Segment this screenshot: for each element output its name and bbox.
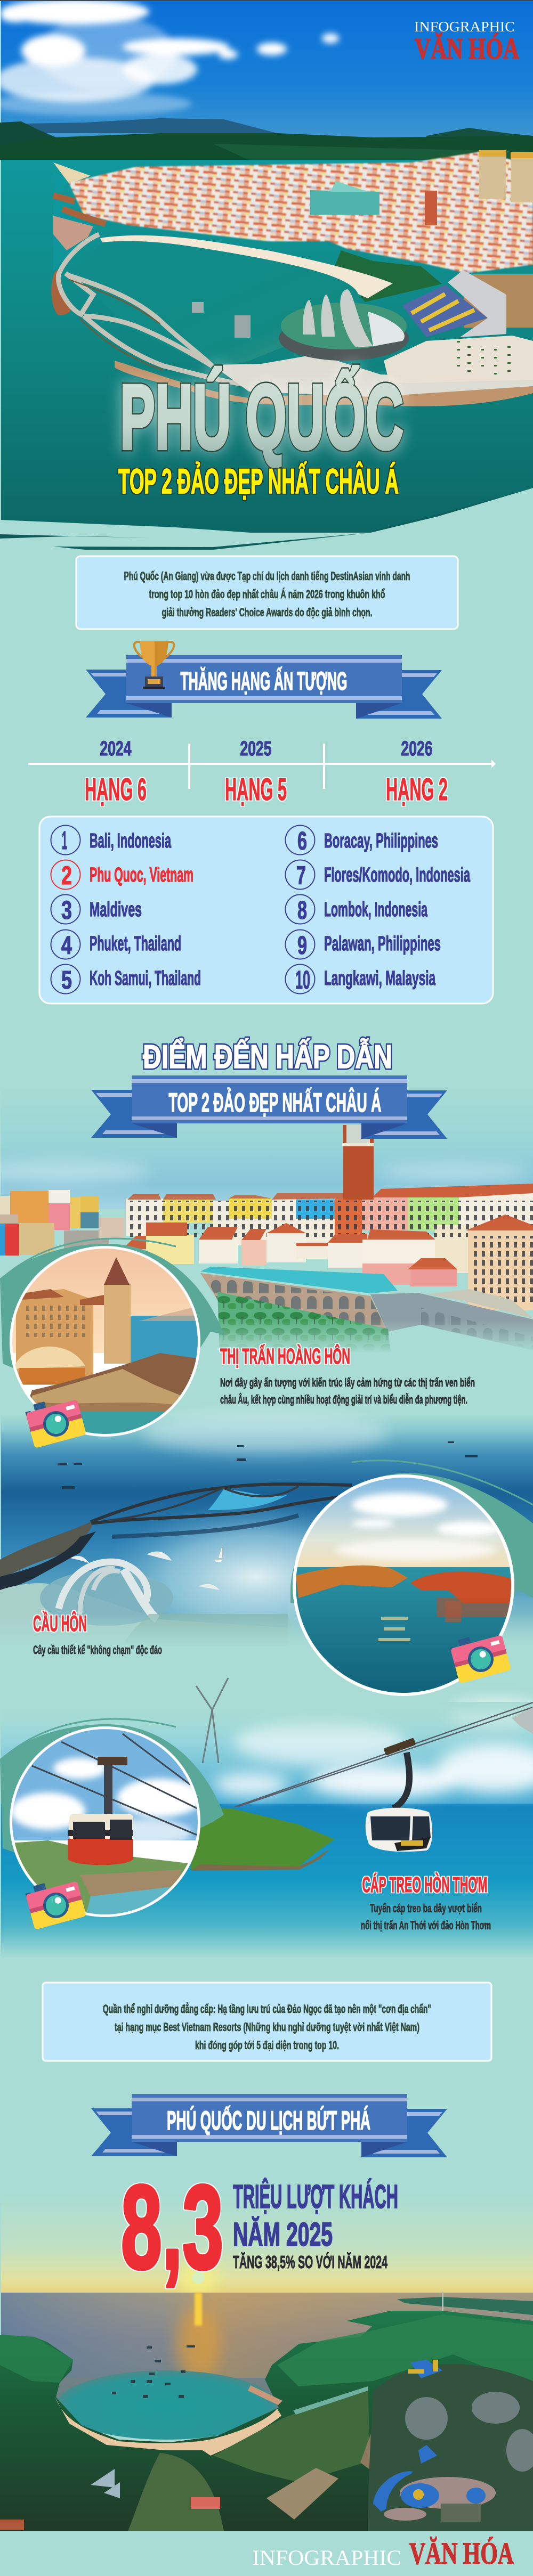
icon: camera 2 xyxy=(449,1629,511,1684)
footer logo: INFOGRAPHIC xyxy=(252,2546,401,2570)
statistic: 8,3 million visitors xyxy=(121,2161,398,2294)
panel: top 10 ranking: Boracay, Philippines xyxy=(324,830,438,852)
banner: Phú Quốc du lịch bứt phá xyxy=(91,2094,447,2157)
cables xyxy=(235,1702,533,1807)
panel: top 10 ranking: Maldives xyxy=(90,899,142,921)
timeline: 2024 xyxy=(100,738,131,760)
panel: top 10 ranking: 7 xyxy=(296,862,306,890)
timeline: 2025 xyxy=(240,738,272,760)
icon: camera 3 xyxy=(24,1875,86,1930)
hero photo xyxy=(0,0,533,550)
panel: top 10 ranking: 9 xyxy=(297,932,307,960)
text: Thị trấn Hoàng Hôn: THỊ TRẤN HOÀNG HÔN xyxy=(220,1344,350,1368)
heading: Điểm đến hấp dẫn: ĐIỂM ĐẾN HẤP DẪN xyxy=(143,1039,392,1075)
panel: top 10 ranking: Palawan, Philippines xyxy=(324,933,441,955)
title: Phú Quốc xyxy=(120,366,403,468)
cabin xyxy=(366,1738,432,1852)
panel: top 10 ranking: 1 xyxy=(62,827,67,855)
timeline: 2026 xyxy=(401,738,433,760)
photo: cable car xyxy=(0,1678,533,1958)
panel: top 10 ranking: Koh Samui, Thailand xyxy=(90,967,201,990)
panel: top 10 ranking: 10 xyxy=(295,966,310,994)
panel: top 10 ranking: Phuket, Thailand xyxy=(90,933,181,955)
tower xyxy=(196,1678,228,1763)
photo: sunset bay xyxy=(0,2189,533,2531)
icon: trophy xyxy=(134,641,174,689)
text: Cáp treo Hòn Thơm xyxy=(361,1872,491,1932)
panel: top 10 ranking: 5 xyxy=(61,966,72,994)
footer logo xyxy=(252,2536,514,2571)
panel: top 10 ranking xyxy=(39,817,493,1004)
stadium xyxy=(279,316,409,361)
panel: top 10 ranking: Lombok, Indonesia xyxy=(324,899,427,921)
logo top xyxy=(414,19,519,66)
brush xyxy=(0,1244,224,1385)
panel: top 10 ranking: 2 xyxy=(61,862,72,890)
circle photo: Cầu Hôn xyxy=(290,1461,533,1698)
banner: Top 2 đảo đẹp nhất châu Á xyxy=(91,1075,447,1139)
circle photo: cable car close-up xyxy=(0,1719,224,1918)
water park xyxy=(368,2364,533,2531)
statistic: 8,3 million visitors: 8,3 xyxy=(121,2161,223,2294)
panel: top 10 ranking: Phu Quoc, Vietnam xyxy=(90,864,193,886)
sand and ring structure xyxy=(0,1583,288,1651)
bay xyxy=(69,242,361,368)
heading: Điểm đến hấp dẫn: ĐIỂM ĐẾN HẤP DẪN xyxy=(143,1039,392,1075)
panel: top 10 ranking: 8 xyxy=(297,896,307,925)
brush edge of hero xyxy=(0,0,533,554)
rocks and bridge xyxy=(51,269,71,315)
panel: top 10 ranking: 4 xyxy=(61,932,72,960)
circle photo: Thị trấn Hoàng Hôn xyxy=(0,1238,224,1438)
text: Cầu Hôn: CẦU HÔN xyxy=(33,1610,87,1636)
statistic: 8,3 million visitors: NĂM 2025 xyxy=(233,2216,333,2253)
photo: bridge over sea xyxy=(0,1412,533,1667)
panel: top 10 ranking: Langkawi, Malaysia xyxy=(324,967,436,990)
resort note box: khi đóng góp tới 5 đại diện trong top 10. xyxy=(195,2039,339,2052)
photo: sunset town xyxy=(0,1076,533,1419)
logo top: INFOGRAPHIC xyxy=(414,19,515,35)
banner: Thăng hạng ấn tượng xyxy=(86,655,442,719)
text: Cầu Hôn xyxy=(33,1610,162,1657)
timeline xyxy=(28,738,496,807)
timeline: HẠNG 6 xyxy=(85,772,147,807)
island xyxy=(190,1807,335,1870)
text: Thị trấn Hoàng Hôn xyxy=(220,1344,475,1406)
text: Cầu Hôn: Cây cầu thiết kế "không chạm" độc đáo xyxy=(33,1643,162,1657)
resort note box xyxy=(43,1983,491,2061)
panel: top 10 ranking: Bali, Indonesia xyxy=(90,830,171,852)
panel: top 10 ranking: 3 xyxy=(61,896,72,925)
intro box: trong top 10 hòn đảo đẹp nhất châu Á năm 2026 trong khuôn khổ xyxy=(149,588,385,601)
statistic: 8,3 million visitors: TĂNG 38,5% SO VỚI NĂM 2024 xyxy=(233,2252,387,2272)
icon: camera 1 xyxy=(24,1393,86,1448)
banner: Thăng hạng ấn tượng: THĂNG HẠNG ẤN TƯỢNG xyxy=(180,667,348,696)
town xyxy=(69,152,533,273)
timeline: HẠNG 5 xyxy=(225,772,287,807)
intro box xyxy=(76,556,458,629)
beach xyxy=(100,235,393,298)
intro box: giải thưởng Readers' Choice Awards do độc giả bình chọn. xyxy=(162,606,372,619)
panel: top 10 ranking: 6 xyxy=(297,827,307,855)
timeline: HẠNG 2 xyxy=(386,772,448,807)
